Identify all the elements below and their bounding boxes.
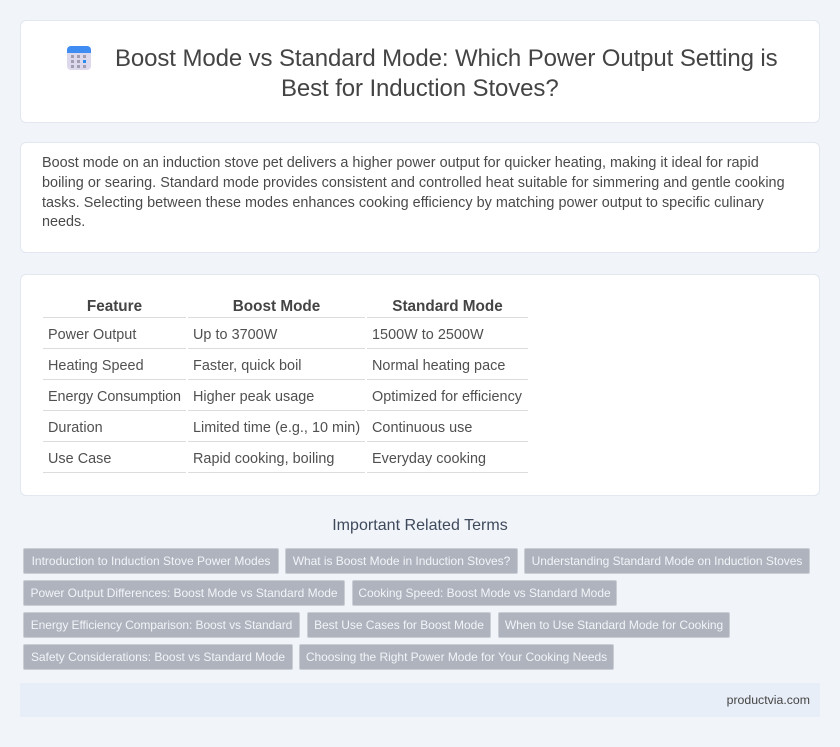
comparison table <box>43 298 528 473</box>
heading: related terms: Important Related Terms <box>332 517 508 534</box>
comparison table: Up to 3700W <box>193 327 277 343</box>
related term tags: What is Boost Mode in Induction Stoves? <box>293 554 510 568</box>
comparison table: 1500W to 2500W <box>372 327 484 343</box>
footer bar <box>20 683 820 717</box>
related term tags: Power Output Differences: Boost Mode vs Standard Mode <box>30 586 338 600</box>
related term tags: When to Use Standard Mode for Cooking <box>505 618 723 632</box>
related term tags: Choosing the Right Power Mode for Your Cooking Needs <box>306 650 607 664</box>
title: Boost Mode vs Standard Mode: Which Power Output Setting is <box>115 45 778 72</box>
panel: intro <box>20 142 820 253</box>
comparison table: Heating Speed <box>48 358 144 374</box>
intro text: Boost mode on an induction stove pet delivers a higher power output for quicker heating, making it ideal for rapid <box>42 155 759 171</box>
comparison table: Higher peak usage <box>193 389 314 405</box>
panel: header <box>20 20 820 123</box>
related term tags: Introduction to Induction Stove Power Modes <box>32 554 270 568</box>
related term tags: Safety Considerations: Boost vs Standard Mode <box>31 650 285 664</box>
comparison table: Energy Consumption <box>48 389 181 405</box>
related term tags: Cooking Speed: Boost Mode vs Standard Mode <box>358 586 611 600</box>
related term tags <box>23 548 810 670</box>
intro text: tasks. Selecting between these modes enhances cooking efficiency by matching power output to specific culinary <box>42 195 764 211</box>
comparison table: Feature <box>87 298 142 315</box>
related term tags: Understanding Standard Mode on Induction Stoves <box>532 554 802 568</box>
comparison table: Duration <box>48 420 103 436</box>
comparison table: Power Output <box>48 327 136 343</box>
comparison table: Standard Mode <box>392 298 503 315</box>
related term tags: Energy Efficiency Comparison: Boost vs Standard <box>31 618 292 632</box>
comparison table: Rapid cooking, boiling <box>193 451 334 467</box>
comparison table: Continuous use <box>372 420 472 436</box>
comparison table: Use Case <box>48 451 111 467</box>
intro text: needs. <box>42 214 85 230</box>
comparison table: Normal heating pace <box>372 358 505 374</box>
title <box>115 45 778 102</box>
intro text: boiling or searing. Standard mode provides consistent and controlled heat suitable for simmering and gentle cooking <box>42 175 785 191</box>
footer credit: productvia.com <box>727 693 810 707</box>
related term tags: Best Use Cases for Boost Mode <box>314 618 484 632</box>
icon: calendar <box>67 46 91 70</box>
comparison table: Boost Mode <box>233 298 320 315</box>
comparison table: Limited time (e.g., 10 min) <box>193 420 360 436</box>
comparison table: Everyday cooking <box>372 451 486 467</box>
title: Best for Induction Stoves? <box>281 75 559 102</box>
comparison table: Optimized for efficiency <box>372 389 522 405</box>
intro text <box>42 155 785 230</box>
comparison table: Faster, quick boil <box>193 358 302 374</box>
panel: comparison table <box>20 274 820 496</box>
